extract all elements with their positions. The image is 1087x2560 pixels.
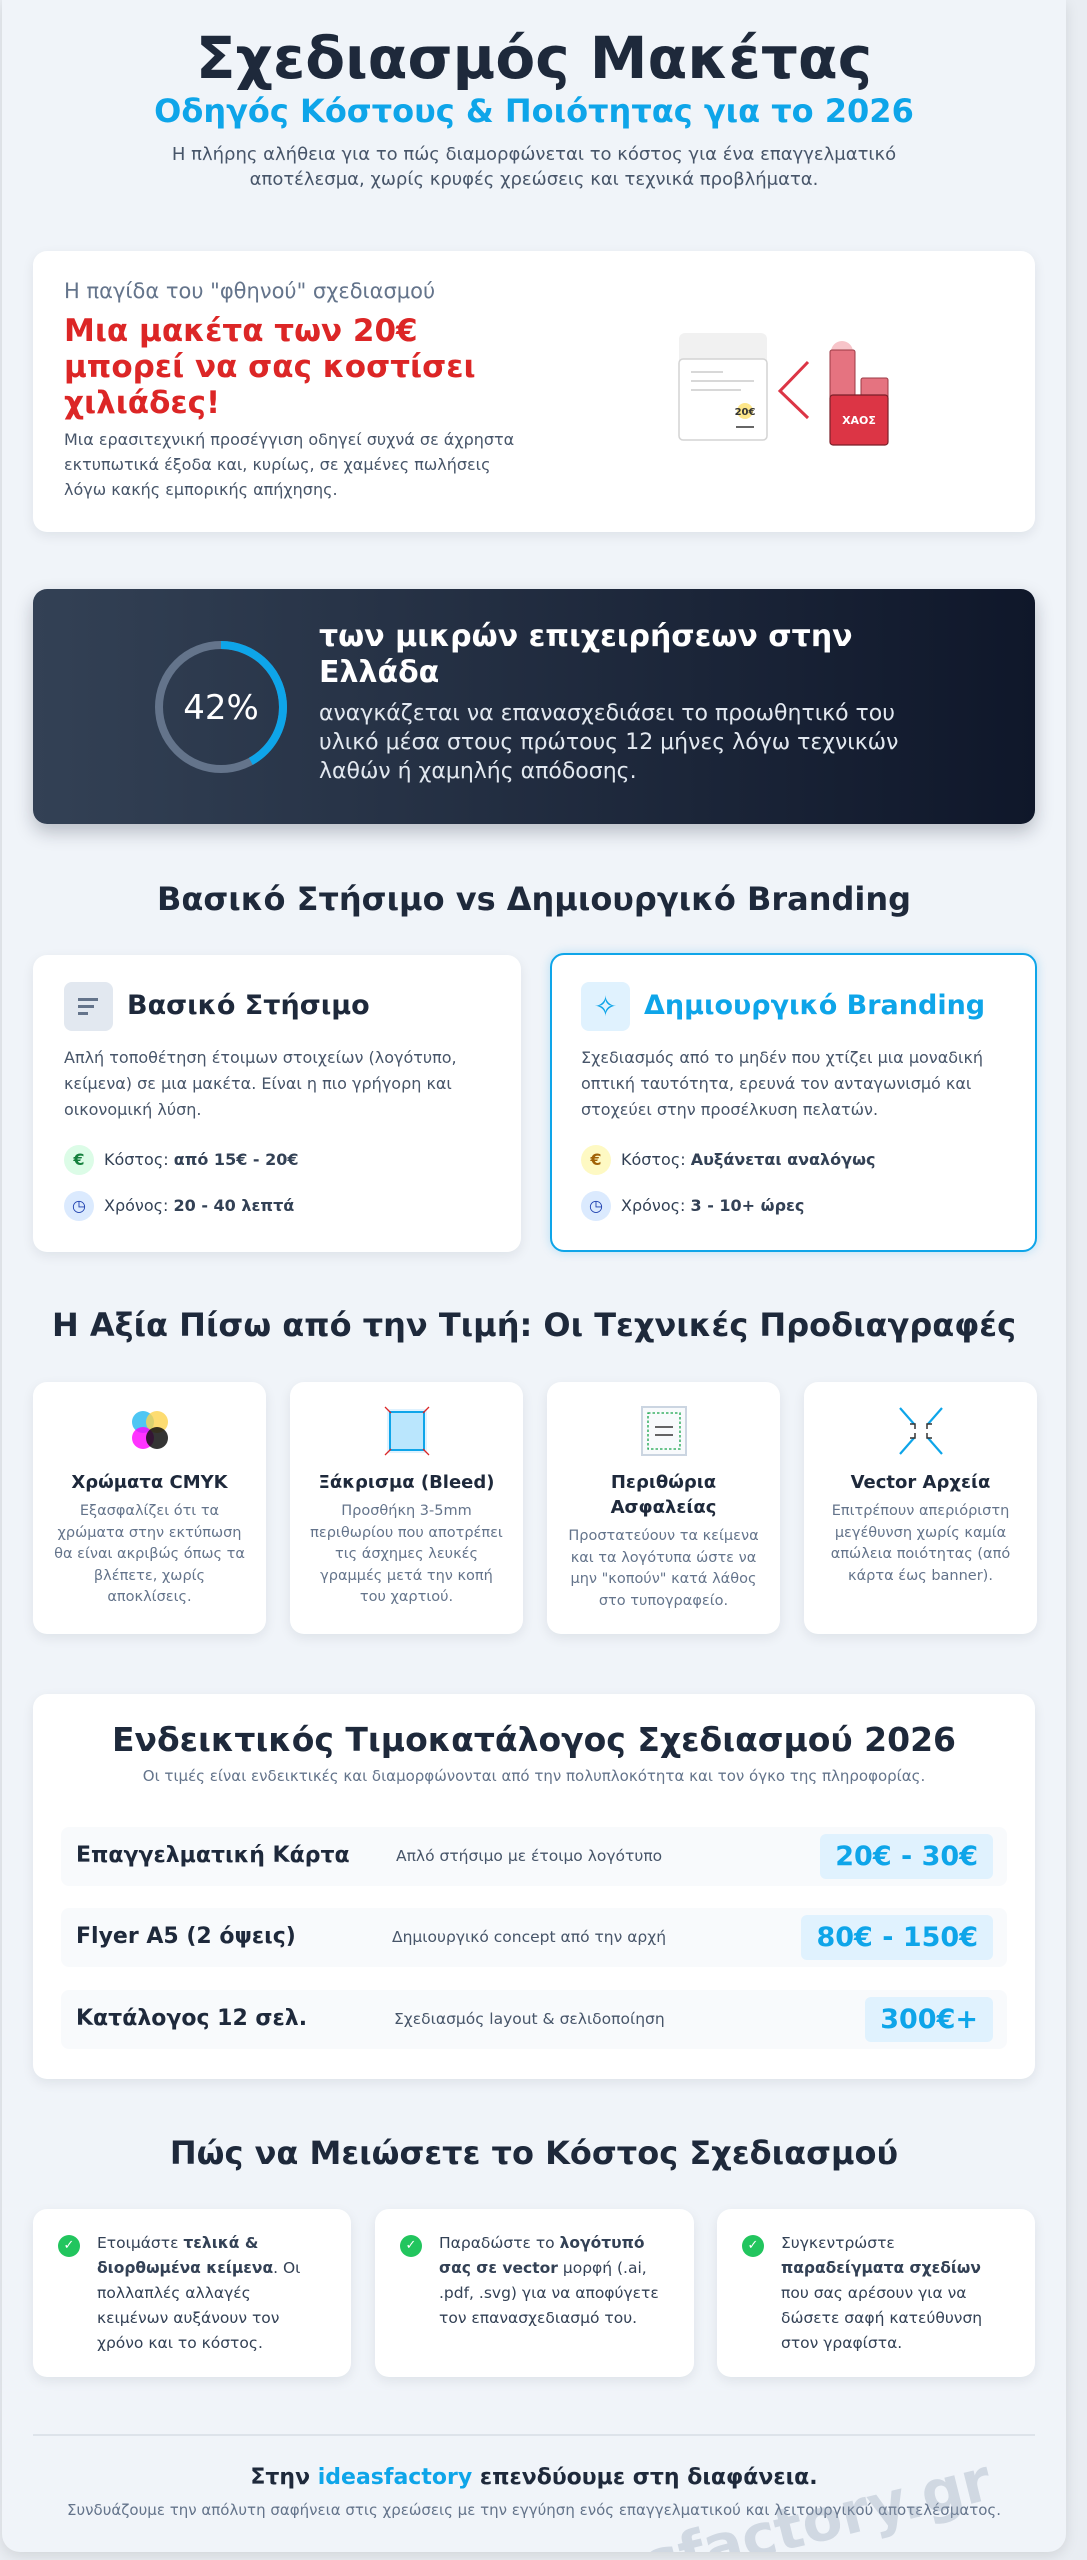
donut chart 42%: 42%: [183, 688, 259, 728]
cost row: €: [590, 1150, 602, 1169]
title: Περιθώρια: [611, 1472, 716, 1493]
title: Ξάκρισμα (Bleed): [319, 1472, 494, 1493]
icon: vector arrows: [899, 1407, 943, 1455]
description: Σχεδιασμός από το μηδέν που χτίζει μια μοναδική οπτική ταυτότητα, ερευνά τον ανταγωνισμό και στοχεύει στην προσέλκυση πελατών.: [581, 1048, 983, 1119]
panel: basic setup: [33, 955, 521, 1252]
tip text: Ετοιμάστε τελικά & διορθωμένα κείμενα. Οι πολλαπλές αλλαγές κειμένων αυξάνουν τον χρόνο και το κόστος.: [97, 2234, 300, 2352]
card title: Δημιουργικό Branding: [644, 990, 985, 1021]
cost row: €: [73, 1150, 85, 1169]
title: Vector Αρχεία: [851, 1472, 990, 1493]
desc: Προσθήκη 3-5mm περιθωρίου που αποτρέπει τις άσχημες λευκές γραμμές μετά την κοπή του χαρτιού.: [310, 1503, 503, 1605]
price list note: Οι τιμές είναι ενδεικτικές και διαμορφώνονται από την πολυπλοκότητα και τον όγκο της πληροφορίας.: [143, 1767, 925, 1785]
desc: Προστατεύουν τα κείμενα και τα λογότυπα ώστε να μην "κοπούν" κατά λάθος στο τυπογραφείο.: [568, 1528, 759, 1608]
illustration: cheap mockup vs chaos: ΧΑΟΣ: [842, 414, 876, 427]
heading: technical specs: Η Αξία Πίσω από την Τιμή: Οι Τεχνικές Προδιαγραφές: [52, 1306, 1016, 1344]
icon: check: [400, 2235, 422, 2257]
stat heading: των μικρών επιχειρήσεων στην Ελλάδα: [319, 619, 853, 690]
icon: lines: [64, 982, 113, 1031]
panel: safety margins: [547, 1382, 780, 1634]
icon: check: [742, 2235, 764, 2257]
cost row: Κόστος: από 15€ - 20€: [104, 1150, 299, 1169]
panel: CMYK: [33, 1382, 266, 1634]
cost row: [581, 1145, 875, 1175]
stat body: αναγκάζεται να επανασχεδιάσει το προωθητικό του υλικό μέσα στους πρώτους 12 μήνες λόγω τεχνικών λαθών ή χαμηλής απόδοσης.: [319, 701, 898, 784]
icon: bleed: [384, 1406, 430, 1456]
title: [610, 1472, 716, 1518]
row: business card: Επαγγελματική Κάρτα: [76, 1843, 350, 1868]
time row: ◷: [72, 1196, 86, 1215]
description: Απλή τοποθέτηση έτοιμων στοιχείων (λογότυπο, κείμενα) σε μια μακέτα. Είναι η πιο γρήγορη και οικονομική λύση.: [64, 1048, 457, 1119]
icon: check: [58, 2235, 80, 2257]
icon: safety margin page: [641, 1406, 687, 1456]
footer text: Συνδυάζουμε την απόλυτη σαφήνεια στις χρεώσεις με την εγγύηση ενός επαγγελματικού και λειτουργικού αποτελέσματος.: [67, 2501, 1001, 2519]
icon: cmyk circles: [132, 1411, 168, 1449]
icon: sparkle: [581, 982, 630, 1031]
kicker: Η παγίδα του "φθηνού" σχεδιασμού: [64, 279, 435, 303]
panel: tip 2: [375, 2209, 694, 2377]
desc: Επιτρέπουν απεριόριστη μεγέθυνση χωρίς καμία απώλεια ποιότητας (από κάρτα έως banner).: [831, 1503, 1010, 1584]
icon: sparkle: ✧: [594, 990, 617, 1023]
icon: check: ✓: [406, 2238, 416, 2253]
price list heading: Ενδεικτικός Τιμοκατάλογος Σχεδιασμού 2026: [112, 1720, 956, 1759]
time row: [64, 1191, 294, 1221]
illustration: cheap mockup vs chaos: [678, 333, 889, 446]
time row: Χρόνος: 3 - 10+ ώρες: [621, 1196, 804, 1215]
desc: Εξασφαλίζει ότι τα χρώματα στην εκτύπωση θα είναι ακριβώς όπως τα βλέπετε, χωρίς αποκλίσεις.: [54, 1503, 245, 1605]
panel: price list: [33, 1694, 1035, 2079]
intro text: Η πλήρης αλήθεια για το πώς διαμορφώνεται το κόστος για ένα επαγγελματικό αποτέλεσμα, χωρίς κρυφές χρεώσεις και τεχνικά προβλήματα.: [172, 144, 896, 190]
cost row: Κόστος: Αυξάνεται αναλόγως: [621, 1150, 875, 1169]
row: flyer: Δημιουργικό concept από την αρχή: [392, 1928, 666, 1946]
panel: vector files: [804, 1382, 1037, 1634]
subtitle: Οδηγός Κόστους & Ποιότητας για το 2026: [154, 92, 914, 130]
panel: creative branding: [550, 953, 1037, 1252]
red heading: Μια μακέτα των 20€ μπορεί να σας κοστίσει χιλιάδες!: [64, 313, 476, 421]
row: catalogue: Κατάλογος 12 σελ.: [76, 2006, 307, 2031]
tip text: Παραδώστε το λογότυπό σας σε vector μορφή (.ai, .pdf, .svg) για να αποφύγετε τον επανασχεδιασμό του.: [439, 2234, 659, 2327]
row: flyer: Flyer A5 (2 όψεις): [76, 1924, 296, 1949]
icon: check: ✓: [64, 2238, 74, 2253]
row: catalogue: Σχεδιασμός layout & σελιδοποίηση: [394, 2010, 665, 2028]
tip text: Συγκεντρώστε παραδείγματα σχεδίων που σας αρέσουν για να δώσετε σαφή κατεύθυνση στον γραφίστα.: [781, 2234, 982, 2352]
title: Σχεδιασμός Μακέτας: [196, 24, 872, 92]
row: flyer: 80€ - 150€: [816, 1922, 978, 1953]
heading: reduce cost: Πώς να Μειώσετε το Κόστος Σχεδιασμού: [170, 2134, 898, 2172]
title: Χρώματα CMYK: [71, 1472, 228, 1493]
body text: Μια ερασιτεχνική προσέγγιση οδηγεί συχνά σε άχρηστα εκτυπωτικά έξοδα και, κυρίως, σε χαμένες πωλήσεις λόγω κακής εμπορικής απήχησης.: [64, 430, 514, 499]
row: catalogue: 300€+: [880, 2004, 978, 2035]
row: business card: [61, 1827, 1007, 1886]
illustration: cheap mockup vs chaos: 20€: [735, 407, 755, 418]
row: flyer: [61, 1908, 1007, 1967]
row: business card: Απλό στήσιμο με έτοιμο λογότυπο: [396, 1847, 662, 1865]
panel: tip 3: [717, 2209, 1035, 2377]
time row: [581, 1191, 804, 1221]
card title: Βασικό Στήσιμο: [127, 990, 370, 1021]
time row: ◷: [589, 1196, 603, 1215]
title: Ασφαλείας: [611, 1497, 716, 1518]
footer heading: Στην ideasfactory επενδύουμε στη διαφάνεια.: [250, 2465, 818, 2490]
panel: tip 1: [33, 2209, 351, 2377]
panel: bleed: [290, 1382, 523, 1634]
panel: 42% stat: [33, 589, 1035, 824]
panel: cheap design trap: [33, 251, 1035, 532]
row: catalogue: [61, 1990, 1007, 2049]
icon: check: ✓: [748, 2238, 758, 2253]
row: business card: 20€ - 30€: [835, 1841, 978, 1872]
heading: basic vs creative: Βασικό Στήσιμο vs Δημιουργικό Branding: [157, 880, 911, 918]
time row: Χρόνος: 20 - 40 λεπτά: [104, 1196, 294, 1215]
cost row: [64, 1145, 299, 1175]
donut chart 42%: [155, 641, 287, 773]
